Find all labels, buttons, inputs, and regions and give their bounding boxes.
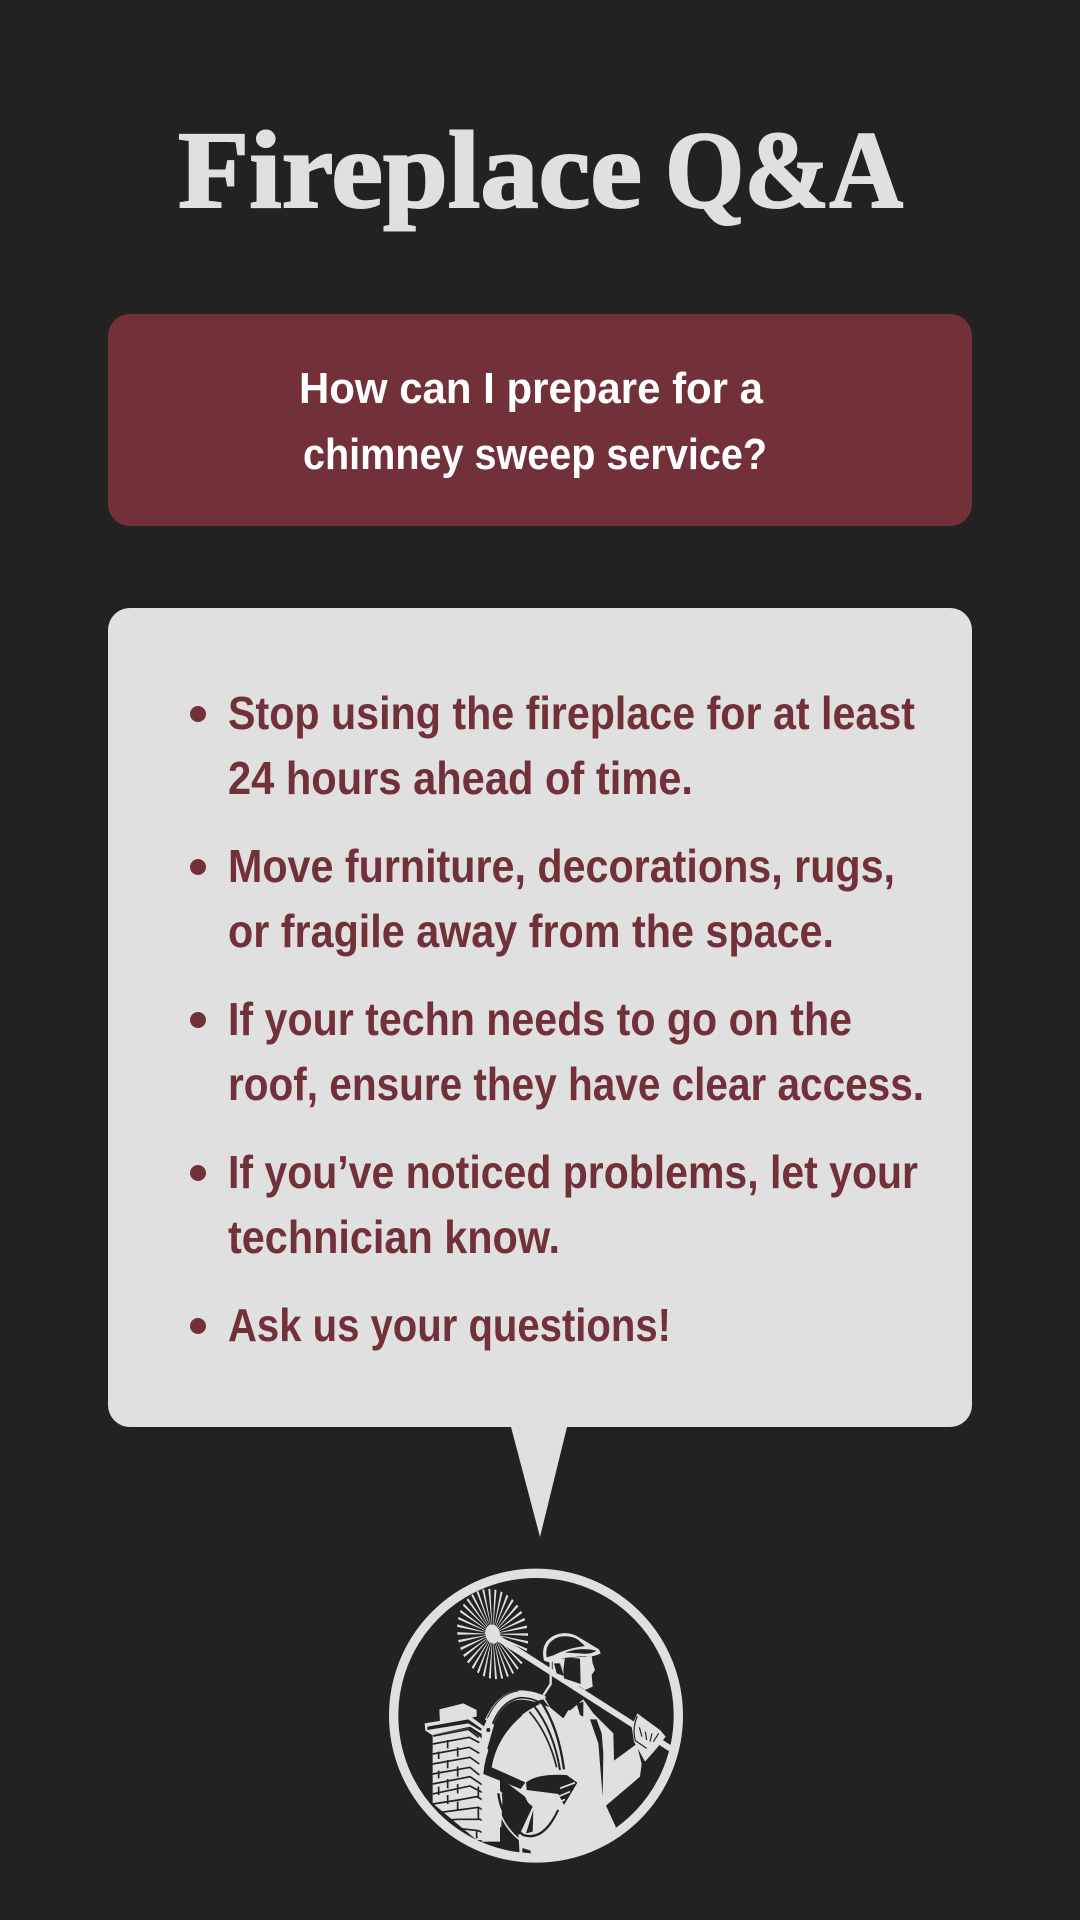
cap: [543, 1633, 601, 1663]
question text: chimney sweep service?: [303, 430, 767, 479]
face: [553, 1656, 595, 1690]
title: Fireplace: [178, 109, 642, 231]
item: stop using: [190, 687, 915, 804]
rope coil top: [487, 1691, 548, 1723]
item: stop using: 24 hours ahead of time.: [228, 752, 693, 804]
item: roof access: roof, ensure they have clear access.: [228, 1058, 924, 1110]
small dark rivet: [486, 1728, 490, 1732]
shoulder strap band: [483, 1709, 525, 1789]
item: roof access: [190, 993, 924, 1110]
bubble shape: [108, 608, 972, 1537]
item: move furniture: Move furniture, decorations, rugs,: [228, 840, 895, 892]
panel: question: [108, 314, 972, 526]
sweep body: [490, 1699, 642, 1860]
panel: speech bubble answers: [108, 608, 972, 1537]
gloved hand: [526, 1775, 577, 1805]
light coil side: [482, 1718, 503, 1842]
item: noticed problems: technician know.: [228, 1211, 560, 1263]
chimney crown: [424, 1718, 484, 1735]
title: [178, 109, 903, 231]
item: move furniture: or fragile away from the space.: [228, 905, 834, 957]
broom pole: [493, 1635, 672, 1749]
sweep brush: [457, 1588, 528, 1680]
brick stack: [433, 1728, 500, 1840]
face shadow: [563, 1657, 581, 1684]
question text: [299, 364, 767, 479]
ear: [554, 1663, 564, 1676]
item: noticed problems: If you’ve noticed problems, let your: [228, 1146, 918, 1198]
raised hand: [632, 1713, 666, 1762]
bullet list: [190, 687, 924, 1351]
title: Q&A: [665, 109, 903, 231]
item: move furniture: [190, 840, 895, 957]
neck: [548, 1683, 572, 1705]
item: roof access: If your techn needs to go on the: [228, 993, 852, 1045]
question text: How can I prepare for a: [299, 364, 764, 413]
suspender strap: [590, 1719, 603, 1797]
chimney: [425, 1703, 500, 1840]
upper body details and head: [527, 1633, 666, 1797]
neck outline: [543, 1660, 551, 1695]
chimney top slab: [439, 1703, 477, 1723]
rope strands on body: [529, 1700, 564, 1770]
logo ring: [394, 1573, 678, 1858]
item: ask us: Ask us your questions!: [228, 1299, 671, 1351]
item: stop using: Stop using the fireplace for at least: [228, 687, 915, 739]
collar: [534, 1696, 584, 1718]
lower coil: [495, 1792, 562, 1853]
icon: chimney sweep logo: [394, 1573, 678, 1860]
item: noticed problems: [190, 1146, 918, 1263]
